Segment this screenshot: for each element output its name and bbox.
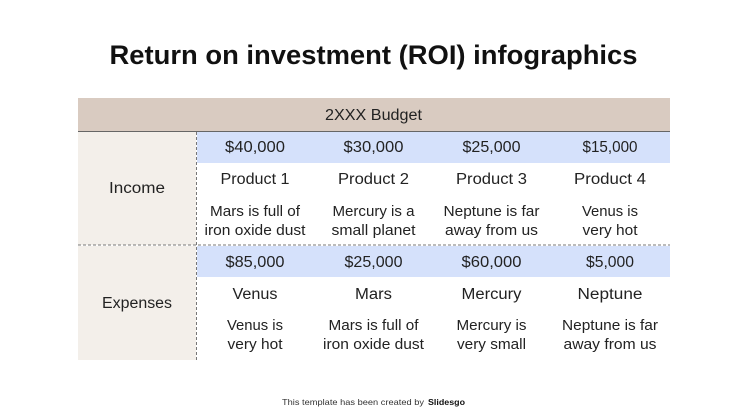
expenses label (78, 246, 196, 360)
income descriptions: very hot (582, 223, 638, 239)
expenses descriptions: Mars is full of (328, 318, 420, 334)
expenses descriptions: Venus is (227, 318, 283, 334)
income amounts band: $30,000 (344, 139, 404, 156)
income product names: Product 4 (574, 171, 646, 188)
expenses amounts band: $85,000 (226, 254, 285, 271)
expenses descriptions: very hot (228, 337, 282, 353)
expenses descriptions: Neptune is far (562, 318, 658, 334)
title: Return on investment (ROI) infographics (110, 40, 638, 70)
income descriptions: small planet (332, 223, 416, 239)
expenses descriptions (227, 318, 658, 353)
income product names (220, 171, 646, 188)
expenses item names (232, 286, 642, 303)
income product names: Product 2 (338, 171, 409, 188)
footer credit: This template has been created by (282, 397, 425, 407)
expenses item names: Mars (355, 286, 392, 303)
income amounts band (197, 132, 670, 163)
income descriptions: Mars is full of (210, 204, 301, 220)
expenses label: Expenses (102, 295, 172, 312)
income amounts band: $15,000 (582, 139, 638, 156)
panel: income row (78, 132, 670, 245)
income product names: Product 3 (456, 171, 527, 188)
expenses descriptions: iron oxide dust (323, 337, 424, 353)
expenses descriptions: very small (457, 337, 526, 353)
income descriptions (204, 204, 638, 239)
expenses amounts band (197, 246, 670, 277)
income amounts band: $25,000 (462, 139, 521, 156)
expenses item names: Mercury (462, 286, 522, 303)
income label (78, 132, 196, 245)
panel: budget table (78, 98, 670, 360)
expenses amounts band: $60,000 (462, 254, 522, 271)
expenses amounts band: $5,000 (586, 254, 634, 271)
panel: expenses row (78, 246, 670, 360)
footer credit: Slidesgo (428, 397, 465, 407)
expenses item names: Venus (232, 286, 278, 303)
income product names: Product 1 (220, 171, 290, 188)
expenses descriptions: Mercury is (456, 318, 526, 334)
income amounts band: $40,000 (225, 139, 285, 156)
expenses item names: Neptune (578, 286, 642, 303)
income descriptions: away from us (445, 223, 538, 239)
table header: 2XXX Budget: 2XXX Budget (325, 107, 423, 124)
expenses amounts band: $25,000 (344, 254, 403, 271)
income descriptions: Neptune is far (444, 204, 540, 220)
income descriptions: Mercury is a (332, 204, 415, 220)
income label: Income (109, 180, 165, 197)
income descriptions: Venus is (582, 204, 638, 220)
expenses descriptions: away from us (564, 337, 656, 353)
table header: 2XXX Budget (78, 98, 670, 131)
income descriptions: iron oxide dust (204, 223, 306, 239)
